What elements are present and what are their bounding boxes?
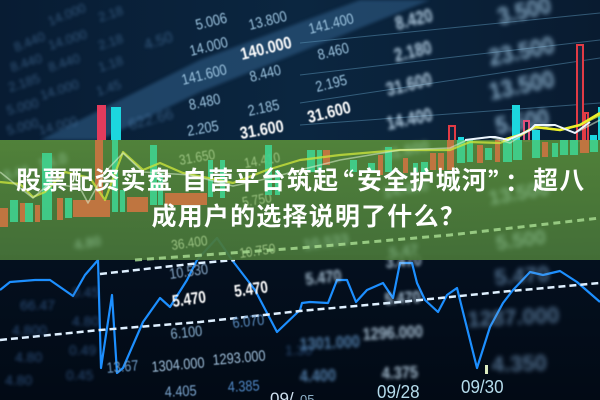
background: stock market data screen: 5.500 <box>493 103 551 139</box>
blurred table numbers, right: 31.600 <box>384 68 434 100</box>
blurred table numbers, left: 14.000 <box>37 113 79 138</box>
background: stock market data screen: 4.80 <box>72 313 99 329</box>
table numbers, sharp: 140.000 <box>239 34 294 64</box>
lower table numbers: 6.070 <box>232 311 265 331</box>
upper trend lines above the band <box>465 113 600 140</box>
background: stock market data screen: 8.44 <box>2 162 31 183</box>
background: stock market data screen: 5.47 <box>388 241 419 262</box>
title: 股票配资实盘 <box>16 167 173 195</box>
blurred table numbers, right: 14.400 <box>384 103 434 134</box>
table numbers, sharp: 141.400 <box>307 9 356 37</box>
lower table numbers: 4.405 <box>164 381 197 400</box>
table numbers, sharp: 31.600 <box>239 117 285 143</box>
blurred table numbers, left: 14.000 <box>46 0 88 29</box>
title: 安全护城河 <box>357 167 488 195</box>
table numbers, sharp: 2.185 <box>246 96 281 119</box>
title: 成用户的选择说明了什么？ <box>152 203 466 231</box>
table numbers, sharp: 31.600 <box>306 99 353 127</box>
background: stock market data screen: 13.500 <box>486 65 557 105</box>
background: stock market data screen: 14.0 <box>37 150 69 174</box>
blurred numbers in band: 14.410 <box>243 149 281 171</box>
table numbers, sharp: 8.440 <box>248 61 283 85</box>
background: stock market data screen: 31.600 <box>382 138 431 164</box>
title: 超八 <box>533 167 585 195</box>
table numbers, sharp: 8.480 <box>187 90 222 113</box>
blurred table numbers, left: 14.000 <box>38 76 81 103</box>
title <box>16 163 585 231</box>
background: stock market data screen: 5.470 <box>305 267 343 289</box>
table numbers, sharp: 5.006 <box>194 9 229 33</box>
background: stock market data screen: 5.500 <box>495 226 547 255</box>
lower table numbers <box>106 260 269 400</box>
blurred table numbers, left: 5.000 <box>5 115 40 138</box>
blurred table numbers, left: 8.440 <box>12 29 47 55</box>
background: stock market data screen: 1296.000 <box>362 323 424 344</box>
blurred table numbers, left: 8.440 <box>46 51 82 75</box>
blurred numbers in band <box>170 146 281 261</box>
background: stock market data screen: 1301.000 <box>299 333 361 354</box>
candlestick bars, upper <box>97 45 600 142</box>
blurred table numbers, left: 2.185 <box>6 71 42 95</box>
blurred table numbers, left: 2.18 <box>96 31 125 53</box>
background: stock market data screen: 5.470 <box>494 261 550 290</box>
background: stock market data screen: 4.800 <box>12 322 47 338</box>
background: stock market data screen: 3.470 <box>385 251 423 272</box>
background: stock market data screen: 66.47 <box>20 297 55 313</box>
blurred table numbers, left: 14.000 <box>46 26 89 53</box>
band bar chart: green bars <box>10 140 598 222</box>
highlighted table row <box>40 0 430 140</box>
background: stock market data screen: 4.80 <box>73 232 103 253</box>
title: “ <box>329 163 355 199</box>
background: stock market data screen: 1.30 <box>285 342 312 358</box>
background: stock market data screen: 23.500 <box>486 31 557 71</box>
title: 自营平台筑起 <box>182 167 339 195</box>
blurred numbers in band: 10.750 <box>238 240 276 261</box>
background: stock market data screen: 4.350 <box>491 350 547 377</box>
blurred table numbers, left: 1.45 <box>94 77 123 99</box>
background: stock market data screen: 1287.000 <box>467 302 560 332</box>
lower table numbers: 1304.000 <box>151 353 205 375</box>
lower table numbers: 1293.000 <box>212 346 266 368</box>
band bar chart: orange bars <box>0 140 589 227</box>
blurred numbers in band: 31.650 <box>178 146 216 168</box>
table grid lines <box>300 13 600 125</box>
blurred table numbers, left: 1.18 <box>96 53 125 75</box>
background: stock market data screen: 4.80 <box>5 372 32 388</box>
blurred table numbers, left: 8.440 <box>8 51 44 75</box>
lower table numbers: 13.67 <box>106 356 139 376</box>
lower table numbers: 6.100 <box>170 322 203 342</box>
date labels <box>270 376 504 400</box>
blurred table numbers, right <box>384 4 435 134</box>
dashed lines, lower <box>0 260 600 340</box>
blurred table numbers, left: 5.000 <box>5 95 40 118</box>
translucent green title band <box>0 140 600 260</box>
table numbers, sharp: 8.460 <box>316 39 351 63</box>
table numbers, sharp: 2.205 <box>186 117 220 139</box>
lower table numbers: 4.385 <box>227 376 260 395</box>
blurred table numbers, left: 4.50 <box>142 29 175 54</box>
background: stock market data screen: 0.45 <box>72 284 99 300</box>
dashed line in band <box>135 218 600 260</box>
table numbers, sharp: 14.000 <box>188 33 230 59</box>
blurred table numbers, left: 2.18 <box>96 3 125 25</box>
background: stock market data screen: 14.400 <box>382 177 430 202</box>
background: stock market data screen: 0.45 <box>66 367 93 383</box>
blurred table numbers, left <box>5 0 175 138</box>
table numbers, sharp <box>180 7 356 143</box>
blurred table numbers, left: 622.66 <box>127 106 175 134</box>
blurred table numbers, right: 2.180 <box>392 36 434 66</box>
title: ： <box>505 163 531 199</box>
lower table numbers: 10.530 <box>168 260 209 282</box>
lower table numbers: 5.470 <box>233 278 269 301</box>
background: stock market data screen: 13.500 <box>487 178 551 210</box>
band trend lines, lime and white <box>0 115 600 203</box>
blurred numbers in band: 5.750 <box>241 189 273 210</box>
date labels: 09/30 <box>461 376 504 397</box>
blurred numbers in band: 36.400 <box>170 232 208 253</box>
table numbers, sharp: 2.195 <box>314 71 349 95</box>
background: stock market data screen: 4.400 <box>300 367 336 386</box>
blue price line <box>0 238 600 373</box>
background: stock market data screen: 4.80 <box>15 349 42 365</box>
background: stock market data screen: 5.470 <box>384 288 422 309</box>
background: stock market data screen: 4.375 <box>382 364 418 383</box>
table numbers, sharp: 13.800 <box>247 7 289 33</box>
background: stock market data screen: 10.533 <box>302 231 350 254</box>
table numbers, sharp: 141.600 <box>180 60 229 88</box>
title: ” <box>488 163 514 199</box>
blurred table numbers, right: 8.420 <box>393 4 435 34</box>
lower table numbers: 5.470 <box>171 288 207 311</box>
background: stock market data screen: 0.49 <box>69 342 96 358</box>
